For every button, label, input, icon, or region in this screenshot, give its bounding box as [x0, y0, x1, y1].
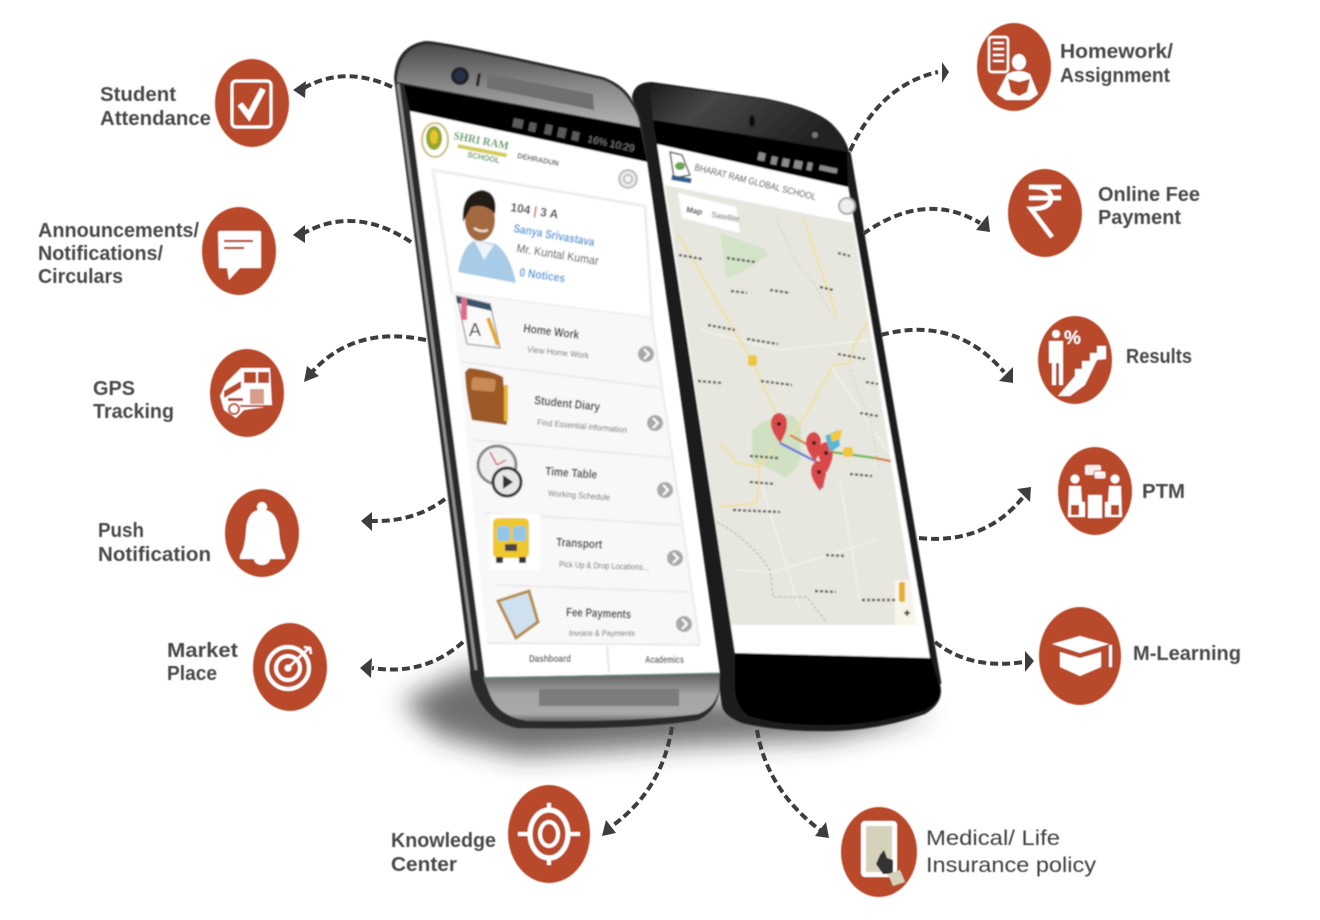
transit icon and highway shields: [748, 355, 853, 457]
label: PTM: [1142, 481, 1185, 503]
icon: crosshair: [508, 785, 590, 883]
row: transport: Transport: [556, 535, 603, 551]
icon: parent teacher meeting: [1058, 447, 1132, 535]
label line 2: Insurance policy: [926, 854, 1097, 877]
label: Medical/ Life: [926, 827, 1060, 850]
phone body: [394, 41, 720, 728]
row: home work: [456, 296, 654, 362]
row: home work: View Home Work: [527, 344, 590, 361]
feature: gps tracking: [93, 349, 284, 437]
icon: student reading: [977, 23, 1051, 111]
bottom tabs: [529, 646, 684, 672]
bottom tabs: Dashboard: [529, 654, 571, 665]
row: student diary: Student Diary: [534, 393, 601, 414]
arrow: m-learning: [935, 642, 1034, 672]
label line 2: Payment: [1098, 207, 1181, 229]
icon: rupee: [1008, 169, 1082, 257]
map type tabs: Satellite: [711, 210, 741, 224]
right side edge: [849, 152, 940, 684]
top metal cap: [397, 44, 640, 127]
icon: stairs and percent: %: [1064, 328, 1081, 349]
label: Results: [1126, 346, 1192, 368]
student profile card: 104 | 3 A: [510, 200, 560, 222]
status icons: 16% 10:29: [586, 134, 636, 155]
icon: tablet touch: [841, 807, 917, 897]
menu rows background: [452, 293, 700, 645]
school logo and name: [422, 123, 560, 168]
map: [660, 180, 930, 630]
arrow: market place: [360, 642, 463, 678]
row: transport: Pick Up & Drop Locations...: [559, 559, 649, 572]
row: fee payments: [498, 591, 692, 638]
feature: market place: [167, 623, 327, 711]
phone: student screen: [394, 41, 720, 728]
phone: map screen: [632, 82, 941, 731]
label line 2: Tracking: [93, 401, 174, 423]
label: Homework/: [1060, 41, 1173, 63]
label line 2: Notifications/: [38, 243, 163, 265]
row: student diary: Find Essential information: [537, 417, 628, 435]
icon: school bus: [490, 514, 540, 570]
label line 2: Place: [167, 663, 217, 685]
icon: open book: [498, 591, 538, 638]
bottom black bezel: [735, 652, 940, 725]
student profile card: Sanya Srivastava: [512, 221, 596, 249]
feature: medical and life insurance: [841, 807, 1097, 897]
phone shadow: [402, 668, 935, 756]
feature: m-learning: [1039, 607, 1241, 705]
feature: push notification: [98, 489, 299, 577]
map type tabs: [678, 193, 741, 233]
student profile card: 0 Notices: [519, 265, 566, 285]
label line 2: Notification: [98, 544, 211, 566]
camera and speaker: [451, 67, 594, 110]
row: fee payments: Fee Payments: [566, 605, 632, 621]
label line 2: Assignment: [1060, 65, 1170, 87]
school header: BHARAT RAM GLOBAL SCHOOL: [693, 162, 817, 203]
side highlight: [398, 84, 476, 670]
arrow: student attendance: [293, 76, 392, 98]
white screen: [657, 144, 930, 658]
row: time table: Working Schedule: [548, 488, 611, 502]
arrow: knowledge center: [602, 727, 672, 836]
icon: checklist: [215, 59, 289, 147]
icon: diary: [465, 368, 508, 425]
phone body: [632, 82, 941, 731]
arrow: medical insurance: [757, 730, 829, 838]
icon: message bubble: [202, 207, 276, 295]
traffic road: [790, 435, 900, 464]
feature: homework and assignment: [977, 23, 1173, 111]
icon: notebook: [456, 296, 500, 348]
feature: results: [1038, 316, 1192, 404]
row: fee payments: Invoice & Payments: [569, 628, 635, 638]
label: Market: [167, 640, 238, 662]
icon: clock: [478, 446, 521, 496]
school logo and name: SHRI RAM: [452, 130, 510, 153]
feature: announcements: [38, 207, 276, 295]
label: Online Fee: [1098, 184, 1200, 206]
border dashes: [717, 522, 827, 623]
icon: stairs and percent: [1038, 316, 1112, 404]
map pins: [771, 413, 833, 491]
label line 2: Center: [391, 854, 457, 876]
arrow: gps tracking: [304, 336, 426, 382]
feature: student attendance: [100, 59, 289, 147]
label: Announcements/: [38, 220, 199, 242]
label: Student: [100, 84, 176, 106]
icon: notebook: A: [469, 320, 481, 340]
map controls: [895, 580, 918, 625]
black band: [404, 85, 647, 162]
label: M-Learning: [1133, 643, 1241, 665]
feature: knowledge center: [391, 785, 590, 883]
row: home work: Home Work: [523, 321, 580, 342]
student photo: [458, 190, 516, 283]
student profile card: Mr. Kuntal Kumar: [516, 241, 600, 268]
arrow: online fee payment: [863, 209, 990, 234]
yellow roads: [677, 217, 870, 507]
bottom tabs: Academics: [645, 655, 684, 666]
icon: target: [253, 623, 327, 711]
arrow: announcements: [293, 221, 411, 243]
feature: online fee payment: [1008, 169, 1200, 257]
row: time table: Time Table: [545, 464, 598, 482]
upper bezel: [650, 84, 846, 150]
status icons: [512, 118, 636, 155]
label: GPS: [93, 378, 135, 400]
blue route: [780, 443, 828, 488]
label line 2: Attendance: [100, 108, 211, 130]
icon: bus: [210, 349, 284, 437]
student profile card: [433, 170, 652, 318]
row: student diary: [465, 368, 663, 435]
status bar: [653, 120, 848, 187]
icon: bell: [225, 489, 299, 577]
row: transport: [490, 514, 683, 572]
school logo and name: DEHRADUN: [517, 151, 560, 168]
map type tabs: Map: [686, 205, 703, 217]
map place marks: [679, 253, 915, 600]
forest areas: [720, 233, 768, 279]
label: Push: [98, 520, 144, 542]
white screen: [410, 111, 720, 678]
school header: [670, 152, 855, 214]
label: Knowledge: [391, 830, 496, 852]
arrow: homework: [850, 62, 949, 151]
arrow: push notification: [361, 499, 445, 531]
arrow: results: [881, 330, 1013, 383]
bottom metal chin: [483, 673, 720, 721]
arrow: ptm: [919, 487, 1031, 539]
row: time table: [478, 446, 673, 502]
earpiece and sensor: [749, 115, 818, 138]
icon: graduation cap: [1039, 607, 1121, 705]
label line 3: Circulars: [38, 266, 123, 288]
school logo and name: SCHOOL: [467, 150, 501, 165]
feature: ptm: [1058, 447, 1185, 535]
